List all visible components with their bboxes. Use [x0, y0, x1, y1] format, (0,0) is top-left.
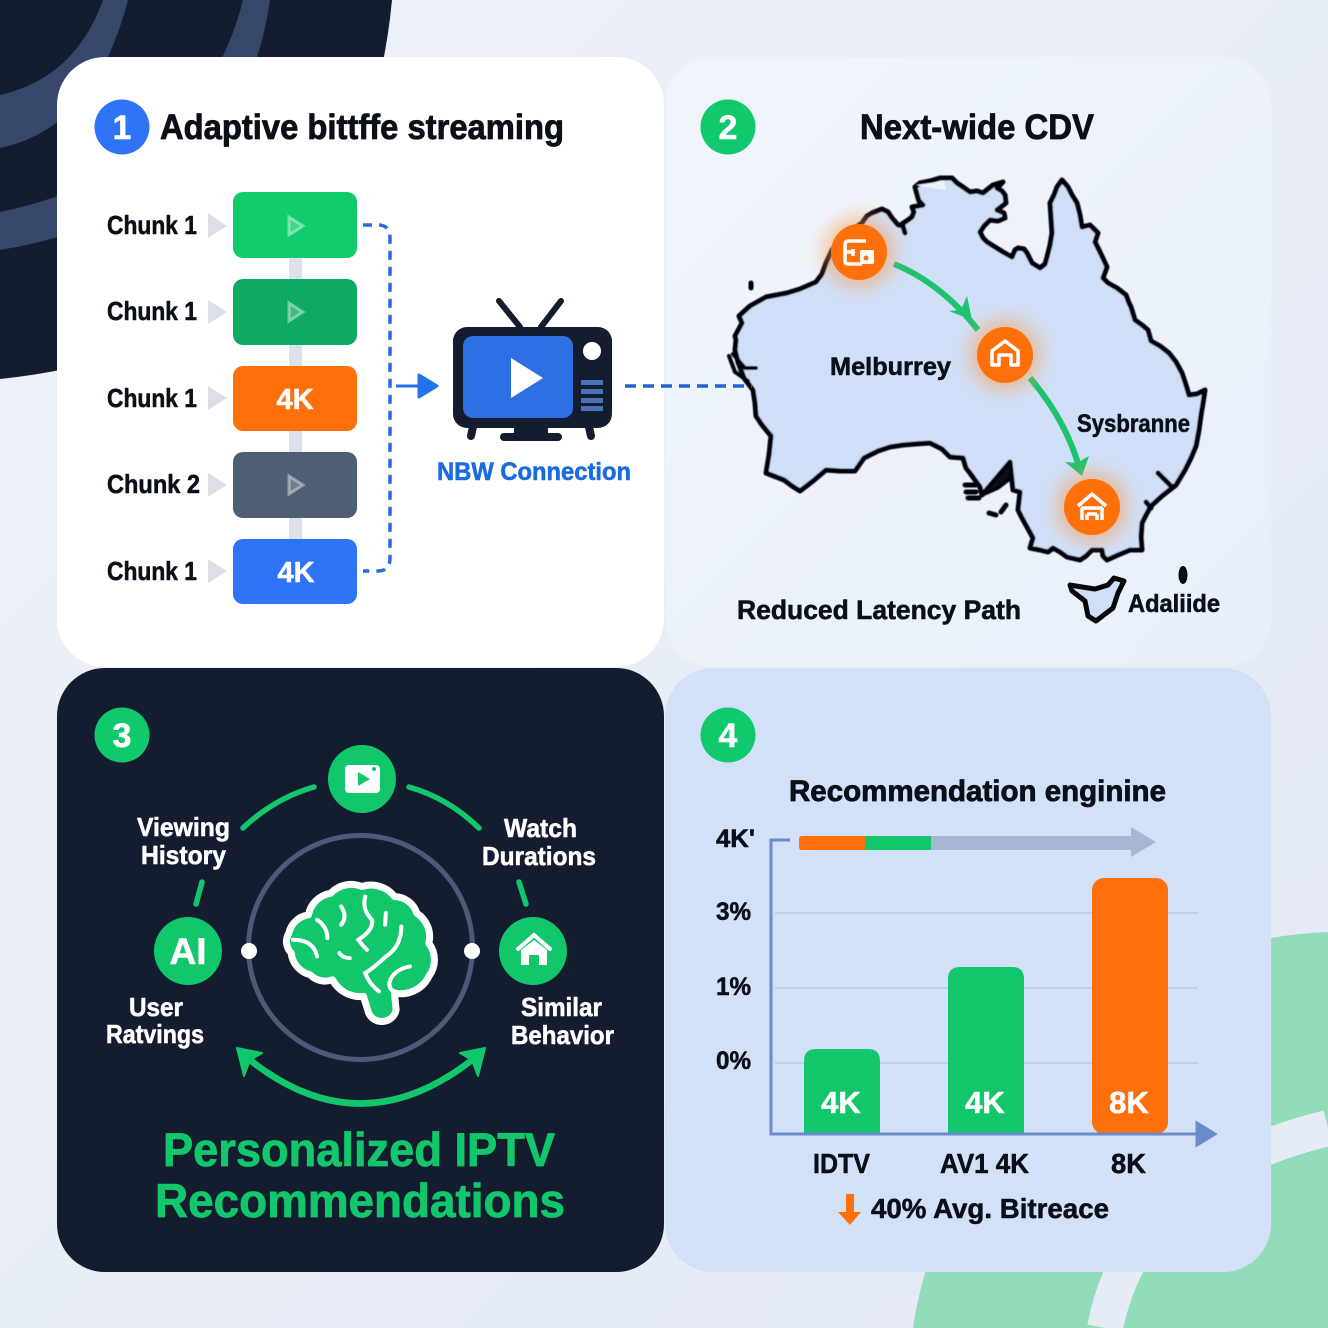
step badge 3: 3 — [113, 717, 131, 755]
arrow to TV — [396, 375, 437, 397]
x axis labels — [813, 1148, 1146, 1179]
map marker 1 — [824, 217, 894, 287]
chunk row 3: 4K — [276, 384, 314, 416]
chunk row 4: Chunk 2 — [107, 469, 200, 499]
label: connection: NBW Connection — [437, 458, 631, 486]
chunk row 3 — [107, 366, 357, 431]
top progress arrow — [799, 827, 1156, 857]
y axis labels: 4K' — [716, 825, 755, 853]
factor labels — [106, 812, 614, 1050]
chart axes — [771, 840, 1215, 1145]
y axis labels: 1% — [716, 973, 751, 1001]
chunk row 5 — [107, 539, 357, 604]
bar: IDTV — [804, 1049, 880, 1134]
y axis labels: 3% — [716, 898, 751, 926]
map marker 3 — [1057, 472, 1127, 542]
heading: personalized recommendations: Recommendations — [155, 1174, 565, 1227]
y axis labels — [716, 825, 755, 1075]
chunk row 2 — [107, 279, 357, 345]
node: AI — [154, 917, 222, 985]
factor labels: Behavior — [511, 1020, 614, 1050]
factor labels: Similar — [521, 992, 602, 1022]
chunk row 1 — [107, 192, 357, 258]
icon: brain — [286, 884, 434, 1021]
map labels: Reduced Latency Path — [737, 595, 1021, 625]
icon: television — [453, 301, 612, 441]
step badge 4 — [700, 708, 756, 762]
map labels: Adaliide — [1128, 590, 1220, 618]
heading: adaptive streaming: Adaptive bittffe streaming — [160, 108, 564, 147]
map: Tasmania — [1070, 578, 1124, 621]
factor labels: History — [141, 840, 227, 870]
node: home — [499, 917, 567, 985]
heading: personalized recommendations — [155, 1123, 565, 1227]
step badge 4: 4 — [719, 717, 738, 755]
node: video — [328, 745, 396, 813]
factor labels: Watch — [504, 813, 577, 843]
x axis labels: AV1 4K — [940, 1148, 1029, 1179]
factor labels: Ratvings — [106, 1019, 204, 1049]
map labels: Sysbranne — [1077, 410, 1190, 438]
bar: IDTV: 4K — [821, 1085, 861, 1120]
heading: CDN: Next-wide CDV — [860, 108, 1095, 147]
dashed bracket — [363, 225, 390, 571]
grid lines — [775, 913, 1198, 1063]
y axis labels: 0% — [716, 1047, 751, 1075]
chunk row 2: Chunk 1 — [107, 296, 197, 326]
central ring — [241, 836, 480, 1060]
node: AI: AI — [170, 931, 206, 972]
chunk row 5: 4K — [277, 557, 315, 589]
step badge 2 — [700, 100, 756, 154]
route arrow 1 — [894, 264, 978, 330]
x axis labels: 8K — [1111, 1148, 1146, 1179]
bar: 8K: 8K — [1109, 1085, 1149, 1120]
heading: personalized recommendations: Personalized IPTV — [163, 1123, 556, 1176]
step badge 1 — [94, 100, 150, 154]
chunk row 3: Chunk 1 — [107, 383, 197, 413]
heading: recommendation engine: Recommendation enginine — [789, 775, 1166, 808]
map marker 2 — [970, 320, 1040, 390]
bar: 8K — [1092, 878, 1168, 1134]
bar: AV1 4K: 4K — [965, 1085, 1005, 1120]
map of Australia — [729, 178, 1205, 560]
step badge 2: 2 — [719, 109, 737, 147]
callout: bitrate reduction: 40% Avg. Bitreace — [871, 1193, 1109, 1224]
route arrow 2 — [1030, 378, 1089, 476]
chunk connector — [289, 250, 302, 550]
factor labels: Viewing — [137, 812, 230, 842]
cycle arcs — [196, 787, 526, 904]
panel 3: personalized recommendations — [57, 668, 664, 1272]
map: small island — [1180, 567, 1186, 583]
x axis labels: IDTV — [813, 1148, 870, 1179]
map labels: Melburrey — [830, 353, 951, 381]
factor labels: Durations — [482, 841, 596, 871]
step badge 1: 1 — [113, 109, 131, 147]
chunk row 4 — [107, 452, 357, 518]
chunk row 1: Chunk 1 — [107, 210, 197, 240]
bar: AV1 4K — [948, 967, 1024, 1134]
factor labels: User — [129, 992, 183, 1022]
link from TV to map — [625, 384, 752, 388]
map labels — [737, 353, 1220, 625]
double-headed arrow — [237, 1048, 485, 1104]
panel 4: recommendation engine chart — [665, 668, 1271, 1272]
icon: down arrow — [838, 1194, 861, 1225]
panel 1: adaptive bitrate streaming — [57, 57, 664, 667]
panel 2: CDN map — [625, 57, 1271, 667]
chunk row 5: Chunk 1 — [107, 556, 197, 586]
step badge 3 — [94, 708, 150, 762]
